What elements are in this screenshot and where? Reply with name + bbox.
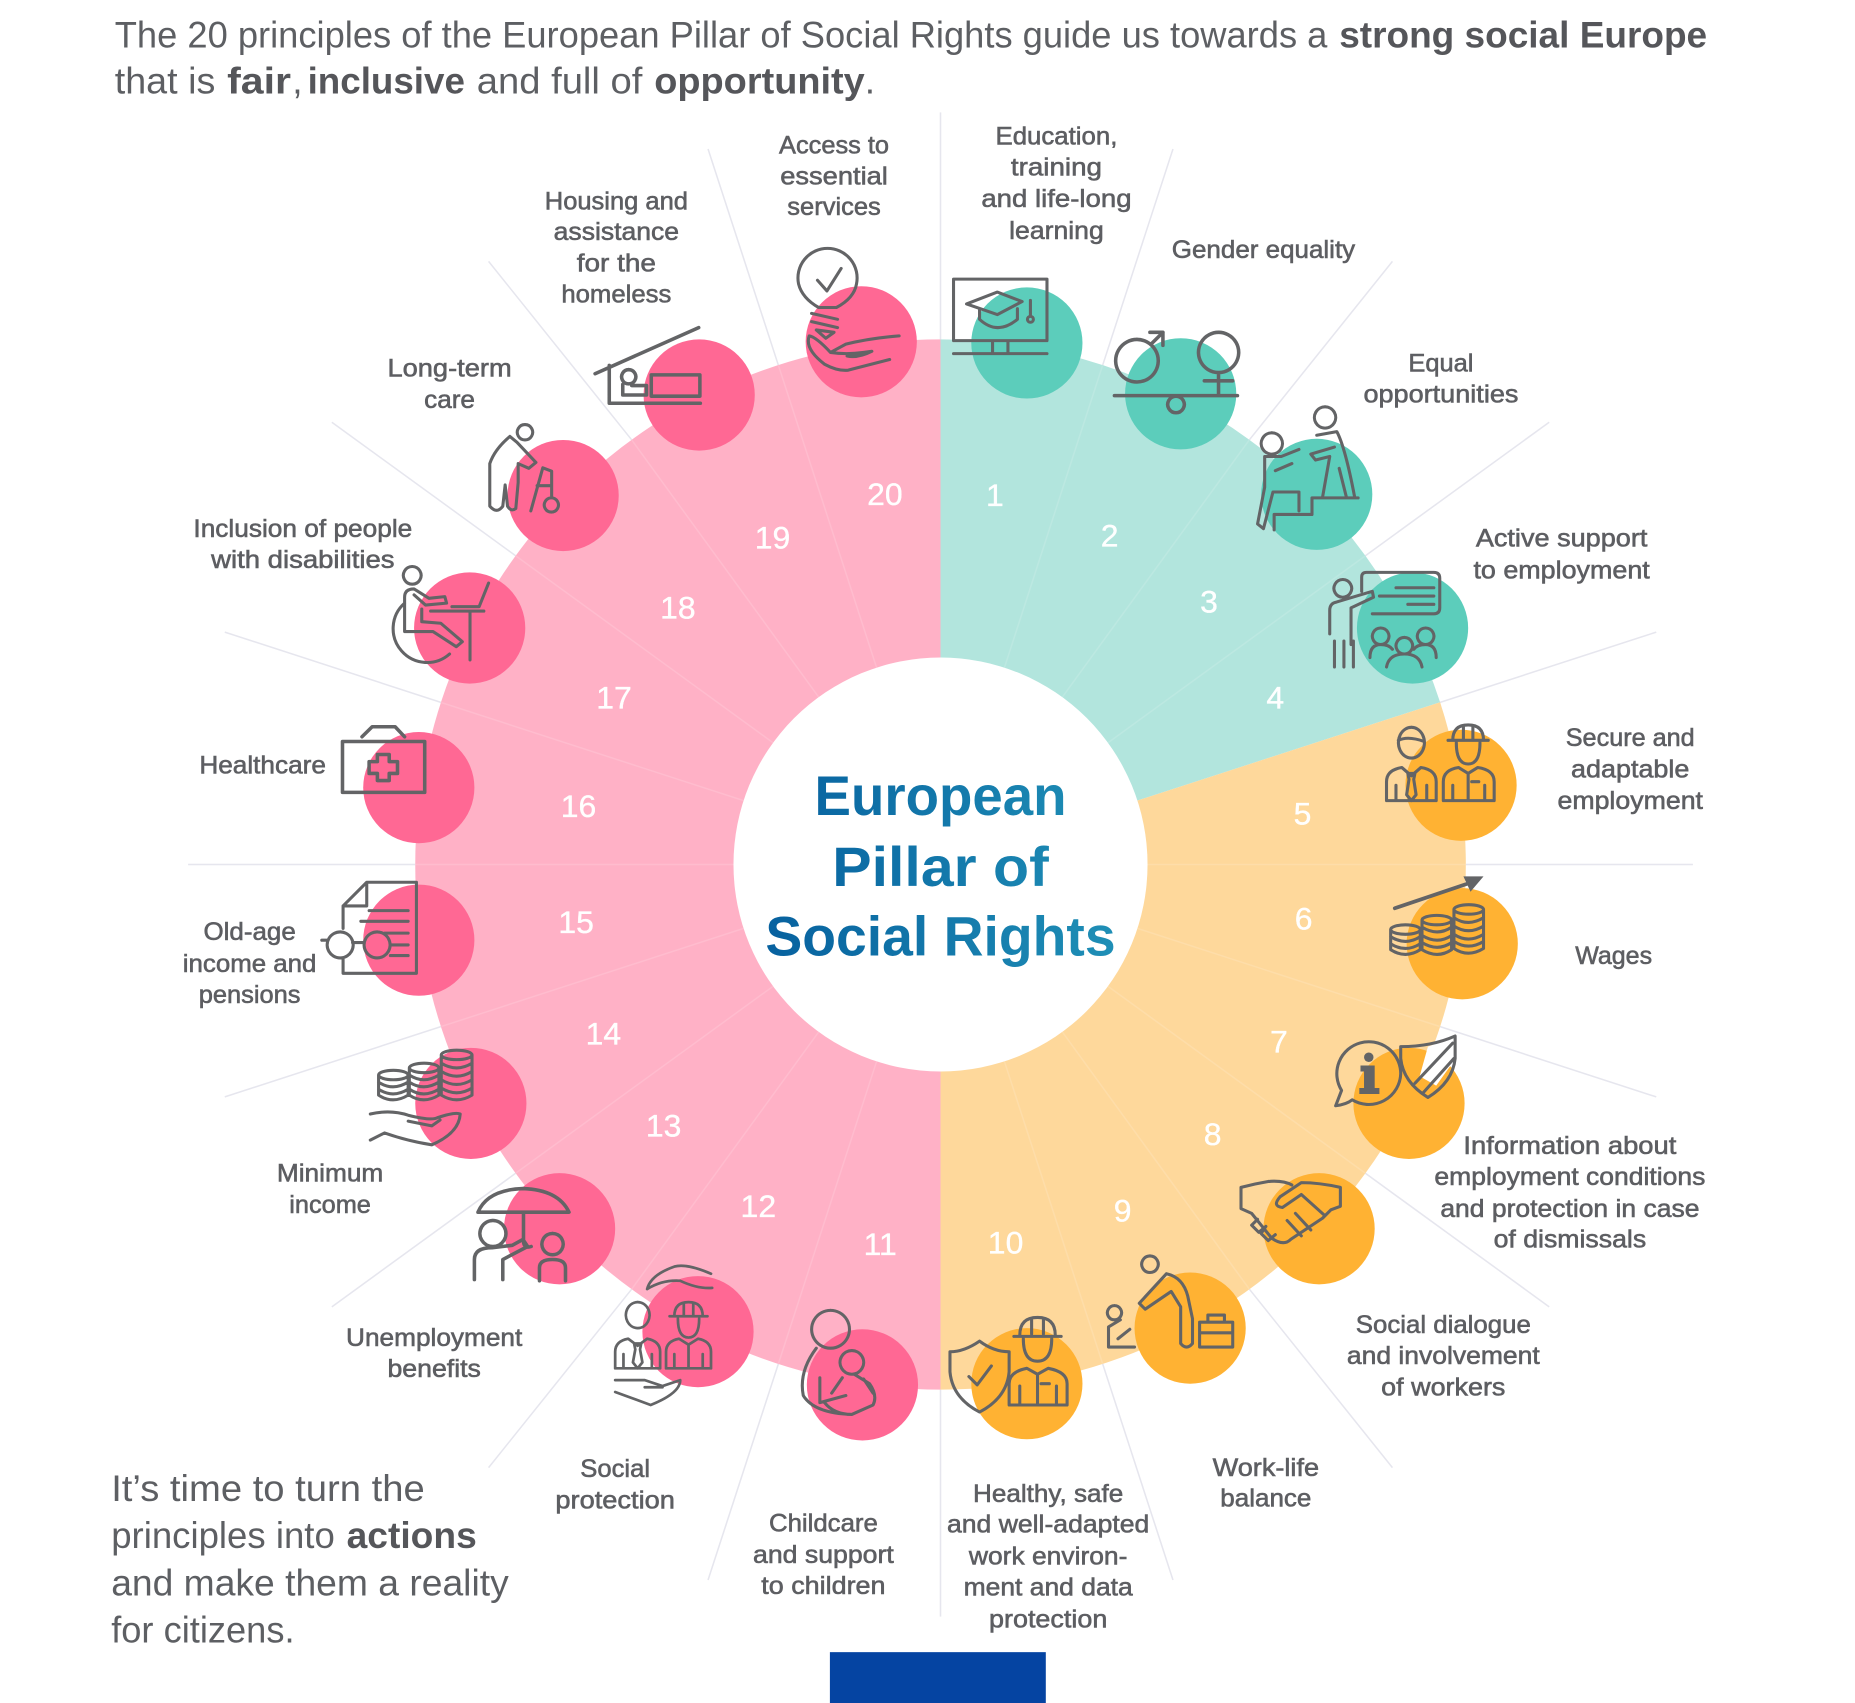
principle numbers: 2 xyxy=(1101,517,1119,553)
principle 20: access to essential services xyxy=(779,132,917,397)
icon: office worker and construction worker xyxy=(1387,725,1494,801)
principle numbers: 9 xyxy=(1114,1193,1132,1229)
principle numbers: 14 xyxy=(586,1015,621,1051)
principle 10: healthy, safe work environment xyxy=(947,1317,1149,1633)
label: Housing and xyxy=(545,187,688,215)
label xyxy=(1473,524,1650,584)
label xyxy=(779,132,889,221)
principle numbers: 20 xyxy=(867,476,903,512)
closing call-to-action text: It’s time to turn the xyxy=(111,1467,425,1509)
label: income and xyxy=(183,950,316,978)
label: pensions xyxy=(199,981,300,1009)
label: Gender equality xyxy=(1172,236,1355,264)
label: Active support xyxy=(1476,524,1647,552)
label: opportunities xyxy=(1363,381,1518,409)
label: Education, xyxy=(996,122,1117,150)
icon: wheelchair user at a laptop desk xyxy=(393,566,489,663)
header intro text: opportunity xyxy=(654,59,865,101)
label xyxy=(947,1480,1149,1633)
principle numbers: 4 xyxy=(1266,679,1284,715)
label xyxy=(183,918,316,1009)
icon: handshake xyxy=(1241,1181,1340,1243)
principle 16: healthcare xyxy=(199,727,474,843)
principle numbers xyxy=(558,476,1313,1262)
label: and well-adapted xyxy=(947,1511,1149,1539)
principle 9: work-life balance xyxy=(1107,1256,1319,1513)
label: services xyxy=(787,193,881,221)
principle numbers: 17 xyxy=(596,679,632,715)
header intro text: , xyxy=(292,59,303,101)
spokes outside the pie xyxy=(188,112,1693,1617)
label: with disabilities xyxy=(210,546,395,574)
label: Long-term xyxy=(387,355,512,383)
closing call-to-action text: for citizens. xyxy=(111,1609,295,1651)
label: and involvement xyxy=(1347,1342,1540,1370)
header intro text: The 20 principles of the European Pillar of Social Rights guide us towards a xyxy=(115,13,1328,55)
icon: workers between protecting hands xyxy=(615,1266,712,1405)
icon: document and glasses xyxy=(322,882,416,973)
principle 15: old-age income and pensions xyxy=(183,882,474,1009)
label xyxy=(753,1510,894,1600)
label xyxy=(555,1455,675,1514)
label: and life-long xyxy=(981,185,1132,213)
icon: person with walking frame xyxy=(490,425,558,512)
principle 11: childcare xyxy=(753,1310,918,1600)
label: protection xyxy=(989,1605,1107,1633)
label xyxy=(1434,1132,1705,1254)
label: adaptable xyxy=(1571,756,1689,784)
principle numbers: 7 xyxy=(1270,1024,1288,1060)
label xyxy=(1213,1454,1319,1513)
principle numbers: 1 xyxy=(986,477,1004,513)
header intro text: . xyxy=(865,59,875,101)
label xyxy=(545,187,688,309)
principle numbers: 6 xyxy=(1295,901,1313,937)
principle 17: inclusion of people with disabilities xyxy=(193,515,525,684)
centre circle with title xyxy=(733,658,1148,1071)
icon: monitor with graduation cap xyxy=(954,279,1047,354)
label: Social dialogue xyxy=(1356,1311,1531,1339)
label: Access to xyxy=(779,132,889,160)
label xyxy=(1363,349,1518,409)
label: Healthcare xyxy=(199,751,326,779)
principle 14: minimum income xyxy=(277,1048,526,1219)
label: Childcare xyxy=(769,1510,878,1538)
label xyxy=(981,122,1132,245)
label: Healthy, safe xyxy=(973,1480,1123,1508)
label: training xyxy=(1011,154,1102,182)
principle numbers: 5 xyxy=(1294,795,1311,831)
header intro text: fair xyxy=(227,59,291,101)
centre circle with title: European xyxy=(815,765,1067,827)
header intro text: that is xyxy=(115,59,215,101)
principle numbers: 12 xyxy=(741,1188,776,1224)
label: benefits xyxy=(387,1355,481,1383)
closing call-to-action text: actions xyxy=(347,1514,477,1556)
header intro text xyxy=(115,13,1707,101)
principle numbers: 3 xyxy=(1200,584,1218,620)
label xyxy=(1347,1311,1540,1402)
header intro text: inclusive xyxy=(308,59,465,101)
principle 1: education xyxy=(954,122,1132,399)
icon: info bubble and shield xyxy=(1336,1036,1455,1106)
centre circle with title: Pillar of xyxy=(832,836,1049,898)
principle 18: long-term care xyxy=(387,355,619,551)
centre circle with title: Social Rights xyxy=(765,906,1116,968)
header intro text: strong social Europe xyxy=(1339,13,1707,55)
label: protection xyxy=(555,1486,675,1514)
label: to children xyxy=(761,1572,886,1600)
icon: shield with check and worker xyxy=(950,1317,1067,1412)
blue footer block xyxy=(830,1652,1046,1703)
label: employment conditions xyxy=(1434,1163,1705,1191)
label xyxy=(277,1159,383,1219)
principle 6: wages xyxy=(1391,876,1652,999)
icon: parent holding child xyxy=(802,1310,875,1414)
label: employment xyxy=(1557,787,1703,815)
label: Wages xyxy=(1575,942,1652,970)
label: Old-age xyxy=(203,918,296,946)
label: income xyxy=(289,1191,371,1219)
label xyxy=(346,1324,522,1383)
icon: person helping another up stairs xyxy=(1258,407,1358,530)
icon: house with person and bed xyxy=(595,328,700,403)
icon: gender symbols on a balance xyxy=(1114,332,1239,413)
label: ment and data xyxy=(964,1573,1134,1601)
principle numbers: 10 xyxy=(988,1225,1023,1261)
icon: light bulb over hand xyxy=(798,248,899,370)
label: and protection in case xyxy=(1440,1195,1699,1223)
principle 2: gender equality xyxy=(1114,236,1355,449)
principle 19: housing and assistance for the homeless xyxy=(545,187,755,451)
principle 12: social protection xyxy=(555,1266,754,1514)
label xyxy=(1557,724,1703,815)
label: balance xyxy=(1220,1485,1311,1513)
icon: coin stacks with rising arrow xyxy=(1391,876,1484,954)
spokes across the pie xyxy=(415,365,1466,1364)
closing call-to-action text xyxy=(111,1467,509,1651)
label: essential xyxy=(780,162,888,190)
principle numbers: 11 xyxy=(864,1226,897,1262)
label: homeless xyxy=(561,281,671,309)
label: and support xyxy=(753,1541,894,1569)
closing call-to-action text: and make them a reality xyxy=(111,1561,509,1603)
label: Information about xyxy=(1463,1132,1676,1160)
icon: presenter with audience xyxy=(1330,572,1440,667)
principle 4: active support to employment xyxy=(1330,524,1650,684)
label: Equal xyxy=(1408,349,1473,377)
label: for the xyxy=(577,249,656,277)
icon: medical case xyxy=(342,727,425,792)
label: Work-life xyxy=(1213,1454,1319,1482)
label: of workers xyxy=(1381,1374,1505,1402)
label: to employment xyxy=(1473,556,1650,584)
label: of dismissals xyxy=(1494,1226,1646,1254)
principle 8: social dialogue xyxy=(1241,1173,1540,1402)
label: care xyxy=(424,386,475,414)
icon: adult, child and briefcase xyxy=(1107,1256,1233,1347)
principle numbers: 19 xyxy=(755,520,790,556)
label xyxy=(193,515,412,574)
principle 7: information about employment conditions xyxy=(1336,1036,1705,1254)
icon: coins above an open hand xyxy=(370,1050,472,1145)
label: assistance xyxy=(554,218,679,246)
label: Secure and xyxy=(1566,724,1695,752)
label: Social xyxy=(580,1455,650,1483)
label: Unemployment xyxy=(346,1324,522,1352)
principle numbers: 8 xyxy=(1204,1116,1221,1152)
icon: umbrella over adult and child xyxy=(474,1189,569,1281)
principle 5: secure and adaptable employment xyxy=(1387,724,1703,841)
principle 3: equal opportunities xyxy=(1258,349,1518,550)
closing call-to-action text: principles into xyxy=(111,1514,335,1556)
principle numbers: 16 xyxy=(561,788,596,824)
principle numbers: 18 xyxy=(660,590,696,626)
principle 13: unemployment benefits xyxy=(346,1173,615,1383)
principle numbers: 15 xyxy=(558,904,594,940)
pie chart: coloured sectors xyxy=(415,339,1466,1390)
label xyxy=(387,355,512,414)
principle numbers: 13 xyxy=(646,1108,681,1144)
label: learning xyxy=(1009,217,1104,245)
label: Minimum xyxy=(277,1159,383,1187)
label: Inclusion of people xyxy=(193,515,412,543)
label: work environ- xyxy=(968,1543,1127,1571)
header intro text: and full of xyxy=(477,59,643,101)
